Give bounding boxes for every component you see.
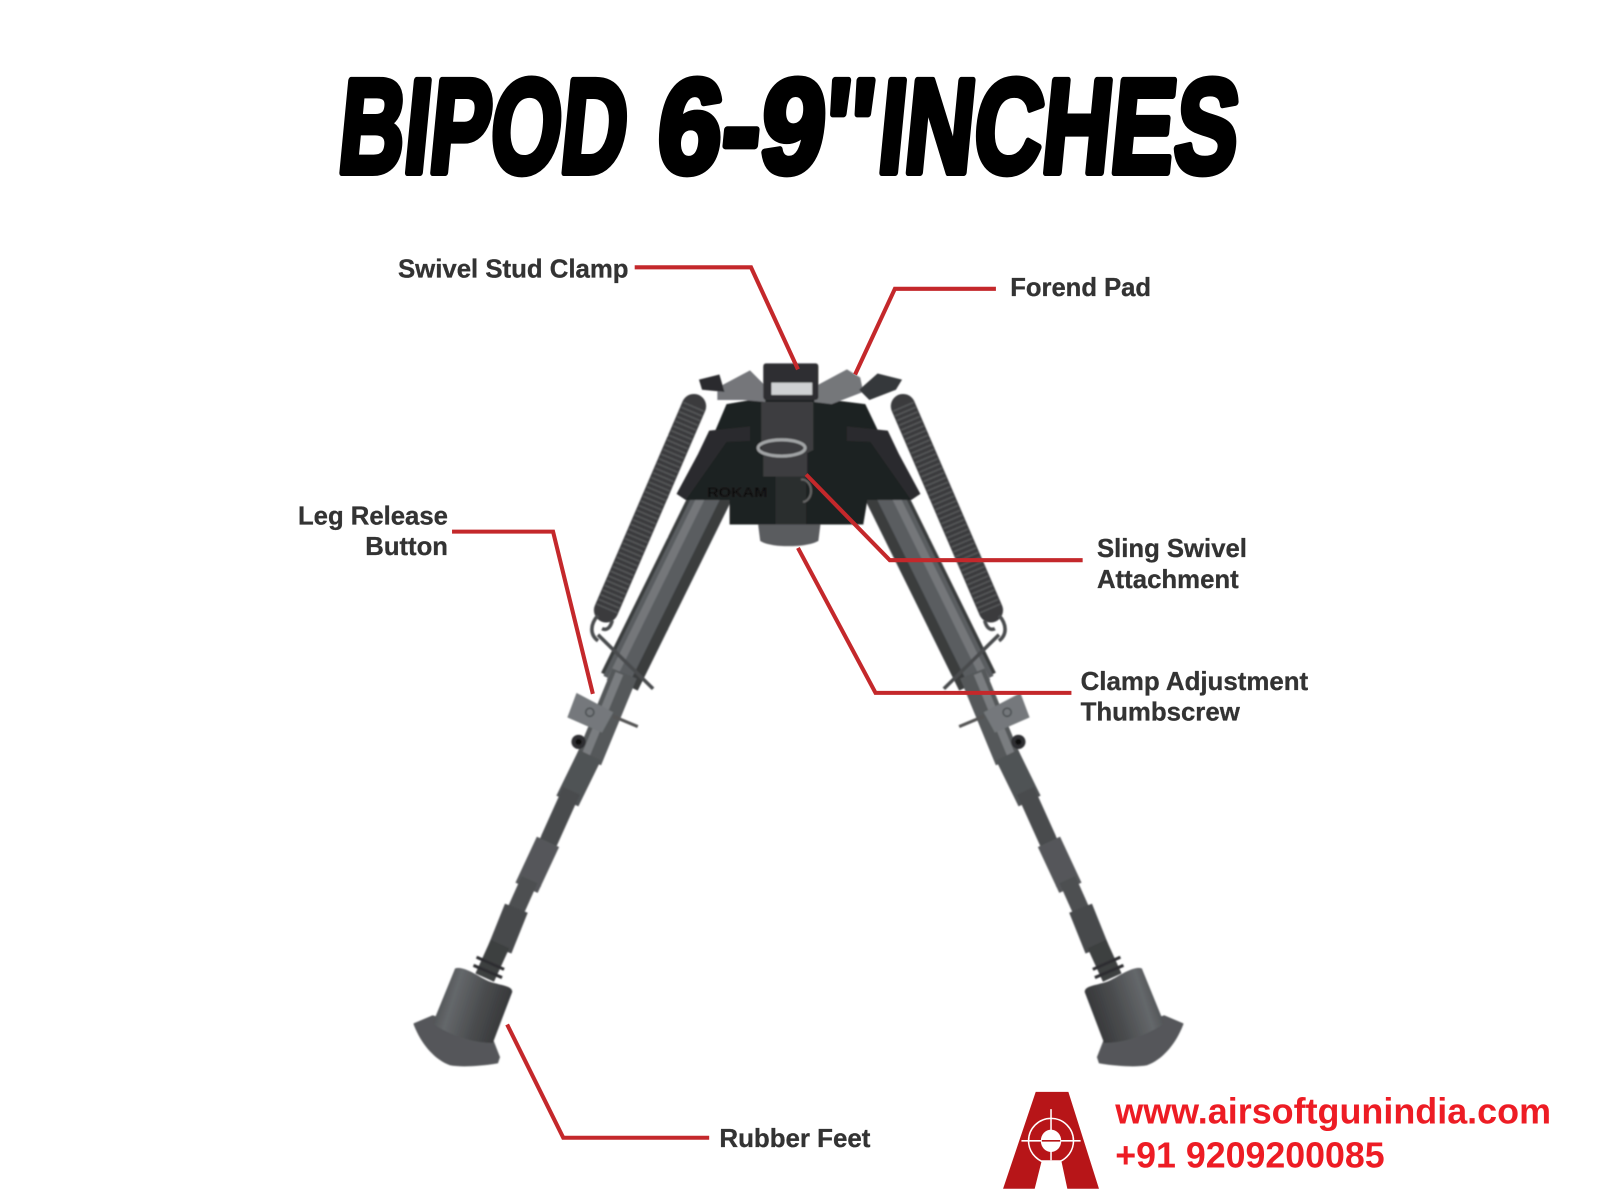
website: www.airsoftgunindia.com [1114, 1091, 1551, 1131]
callout: clamp adjustment thumbscrew [798, 548, 1309, 726]
logo: A with target [1003, 1092, 1099, 1189]
callout: leg release button [298, 502, 593, 694]
callout: clamp adjustment thumbscrew: Clamp Adjustment [1081, 668, 1309, 696]
left leg [413, 406, 727, 1066]
callout: sling swivel attachment [806, 474, 1247, 594]
callout: rubber feet: Rubber Feet [719, 1125, 871, 1153]
callout: leg release button: Button [365, 533, 448, 561]
callout: clamp adjustment thumbscrew: Thumbscrew [1081, 698, 1240, 726]
watermark: ROKAM [707, 485, 767, 501]
title: BIPOD [333, 53, 635, 201]
title: '' [818, 53, 881, 201]
bipod illustration [413, 363, 1184, 1066]
forend pad saddle [699, 363, 902, 404]
right leg [870, 406, 1184, 1066]
callout: forend pad [855, 274, 1151, 374]
callout: swivel stud clamp: Swivel Stud Clamp [398, 256, 629, 284]
body [677, 398, 920, 524]
callout: sling swivel attachment: Attachment [1097, 566, 1239, 594]
callout: sling swivel attachment: Sling Swivel [1097, 535, 1247, 563]
title: 6-9 [651, 53, 833, 201]
callout: leg release button: Leg Release [298, 502, 448, 530]
sling swivel ring [758, 440, 805, 456]
phone: +91 9209200085 [1115, 1135, 1385, 1175]
thumbwheel [758, 524, 820, 546]
callout: swivel stud clamp [398, 256, 798, 369]
callout: rubber feet [507, 1024, 871, 1153]
title: INCHES [873, 53, 1246, 201]
callout: forend pad: Forend Pad [1010, 274, 1151, 302]
title [333, 53, 1246, 201]
